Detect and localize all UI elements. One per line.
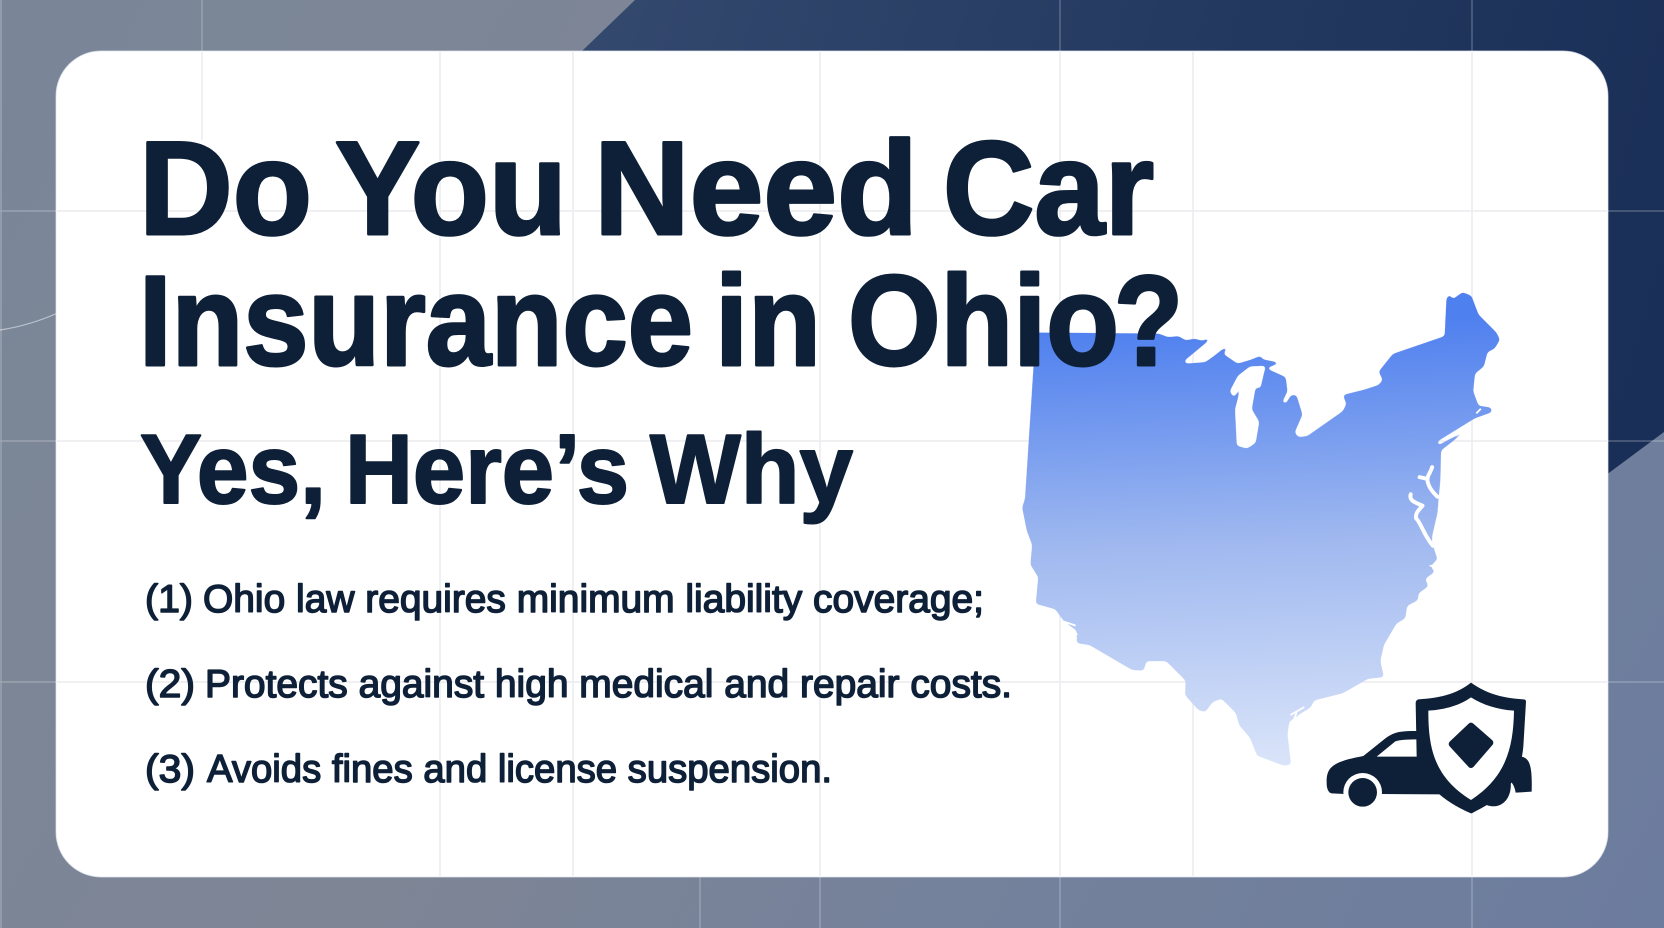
icon: car with shield (1327, 683, 1532, 813)
subtitle: Why (650, 414, 853, 524)
title line 1: Need (594, 115, 918, 263)
title line 2: in (715, 250, 821, 393)
reason 3: (3) (145, 748, 195, 791)
title line 2: Insurance (139, 250, 693, 393)
subtitle: Here’s (345, 414, 629, 524)
reason 1: (1) (145, 578, 193, 621)
lake michigan (1230, 366, 1266, 449)
reason 1: Ohio law requires minimum liability coverage; (203, 578, 984, 621)
reason 2: Protects against high medical and repair costs. (205, 663, 1012, 706)
chesapeake and delaware bays (1410, 467, 1437, 546)
title line 2: ? (1114, 250, 1183, 393)
dark navy corner shape (500, 0, 1664, 487)
reason 3: Avoids fines and license suspension. (207, 748, 832, 791)
title (139, 115, 1183, 393)
title line 1: Car (943, 115, 1154, 263)
reason 2: (2) (145, 663, 195, 706)
title line 1: You (335, 115, 567, 263)
list of reasons (145, 578, 1012, 791)
map of the eastern United States (1022, 292, 1500, 766)
subtitle: Yes, (140, 414, 326, 524)
title line 1: Do (139, 115, 312, 263)
title line 2: Ohio (848, 250, 1119, 393)
